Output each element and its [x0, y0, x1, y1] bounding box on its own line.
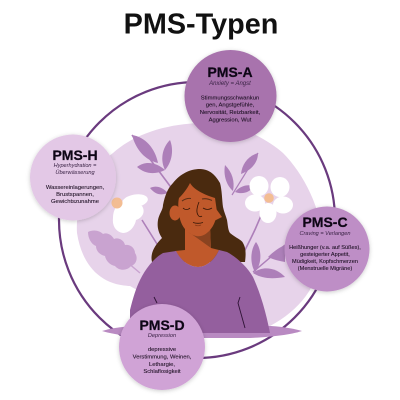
ear left	[170, 206, 180, 220]
panel: PMS-A: Nervosität, Reizbarkeit,	[200, 110, 261, 116]
panel: PMS-C: Craving = Verlangen	[300, 231, 350, 237]
flower: left	[112, 192, 162, 252]
panel: PMS-C: Heißhunger (v.a. auf Süßes),	[289, 245, 361, 251]
panel: PMS-C	[284, 206, 370, 292]
face	[178, 183, 217, 235]
plant: right lower branch	[251, 242, 285, 278]
panel: PMS-D: depressive	[148, 347, 176, 353]
panel: PMS-D: Verstimmung, Weinen,	[133, 354, 192, 360]
panel: PMS-D: Lethargie,	[149, 362, 175, 368]
title: PMS-Typen	[124, 8, 278, 40]
flower: right	[243, 176, 293, 254]
panel: PMS-C: (Menstruelle Migräne)	[298, 266, 352, 272]
plant: lower left leaf	[88, 231, 140, 273]
panel: PMS-A: PMS-A	[207, 64, 253, 80]
panel: PMS-A: Stimmungsschwankun	[201, 96, 259, 102]
panel: PMS-H: Überwässerung	[55, 169, 95, 176]
panel: PMS-H: Brustspannen,	[56, 192, 94, 198]
panel: PMS-D: PMS-D	[139, 317, 185, 333]
panel: PMS-A	[184, 50, 276, 142]
neck shadow	[188, 230, 211, 248]
plant: right upper branch	[224, 153, 258, 195]
panel: PMS-D	[119, 304, 205, 390]
ground ellipse	[102, 326, 302, 338]
ear right	[212, 206, 222, 222]
panel: PMS-D: Depression	[148, 333, 176, 339]
panel: PMS-H	[30, 134, 116, 220]
hair	[151, 169, 246, 262]
panel: PMS-C: gesteigerter Appetit,	[300, 252, 350, 258]
panel: PMS-C: Müdigkeit, Kopfschmerzen	[292, 259, 358, 265]
shirt	[130, 250, 270, 333]
panel: PMS-H: PMS-H	[52, 147, 98, 163]
panel: PMS-C: PMS-C	[302, 214, 348, 230]
background blob	[77, 123, 322, 326]
panel: PMS-D: Schlaflosigkeit	[143, 369, 181, 375]
woman	[130, 169, 270, 333]
plant: upper left branch	[132, 135, 173, 194]
ring	[59, 82, 335, 358]
panel: PMS-A: Anxiety = Angst	[208, 81, 251, 87]
panel: PMS-H: Gewichtszunahme	[51, 199, 99, 205]
panel: PMS-H: Wassereinlagerungen,	[46, 185, 104, 191]
sleeve lines	[238, 297, 245, 328]
panel: PMS-H: Hyperhydration =	[54, 163, 97, 169]
eyes and mouth	[182, 198, 212, 226]
neck and chest	[175, 226, 219, 267]
panel: PMS-A: gen, Angstgefühle,	[206, 103, 255, 109]
panel: PMS-A: Aggression, Wut	[209, 118, 252, 124]
